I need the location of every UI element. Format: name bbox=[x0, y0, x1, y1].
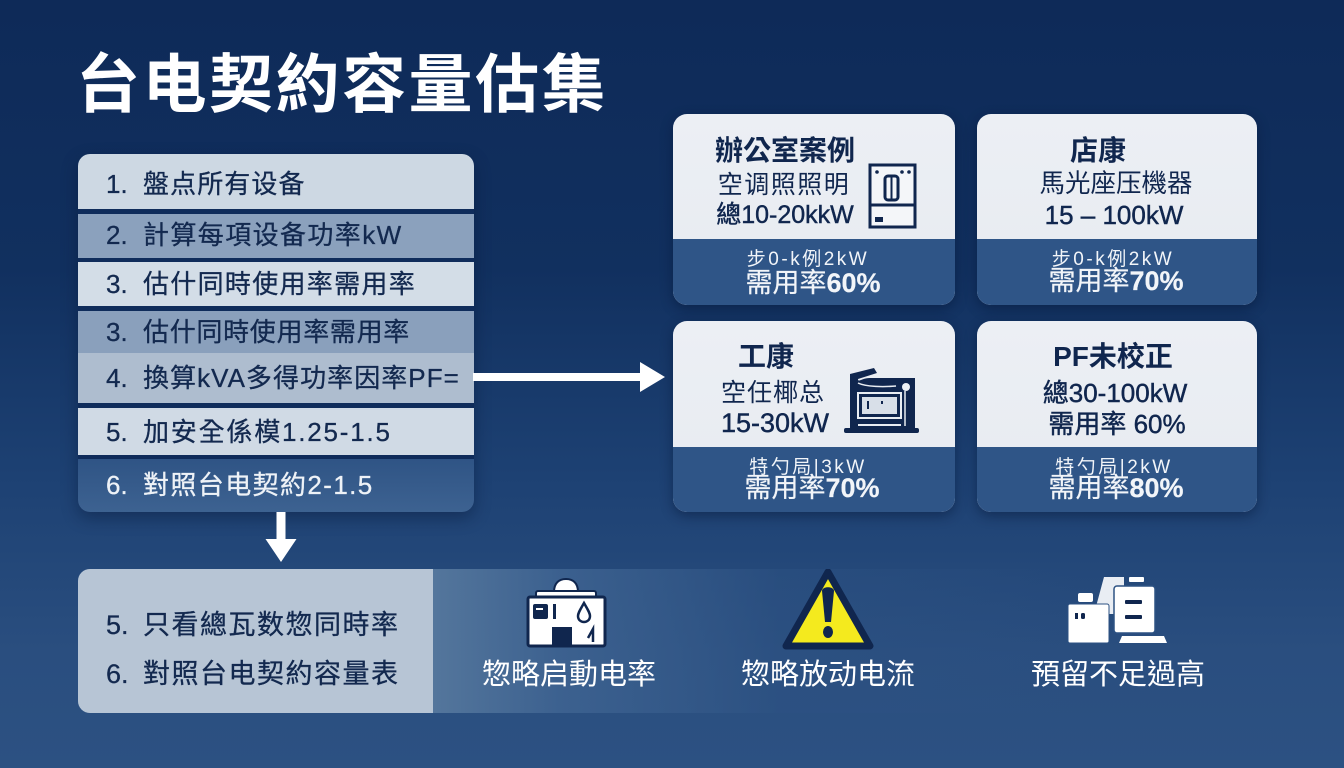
label: 惣略放动电流 bbox=[741, 659, 915, 691]
card: factory bbox=[673, 321, 955, 512]
icon: cabinets bbox=[1068, 577, 1167, 643]
label: 惣略启動电率 bbox=[482, 659, 656, 691]
card body text: 馬光座压機器 bbox=[1039, 170, 1193, 198]
step 2 bbox=[78, 214, 474, 258]
step 1: 盤点所有设备 bbox=[143, 169, 306, 199]
panel: common mistakes bbox=[78, 569, 1258, 713]
card footer bbox=[673, 239, 955, 305]
panel: steps list bbox=[78, 154, 474, 512]
step 3: 估什同時使用率需用率 bbox=[143, 269, 416, 299]
icon: fridge bbox=[868, 164, 916, 228]
card: office case bbox=[673, 114, 955, 305]
card body text: 總30-100kW bbox=[1043, 378, 1187, 408]
card: factory: 15-30kW bbox=[721, 408, 829, 438]
step 3 repeated: 估什同時使用率需用率 bbox=[143, 317, 410, 347]
card footer: 特勺局|2kW bbox=[1055, 457, 1173, 478]
card footer: 需用率80% bbox=[1048, 473, 1184, 503]
card heading: 辦公室案例 bbox=[715, 135, 855, 166]
step 3: 3. bbox=[106, 269, 128, 299]
step 6: 6. bbox=[106, 470, 128, 500]
step 4: 換算kVA多得功率因率PF= bbox=[143, 363, 460, 393]
mistake: reserve margin bbox=[1031, 577, 1205, 691]
icon: building bbox=[526, 578, 606, 648]
step 3 repeated: 3. bbox=[106, 317, 128, 347]
step 4 bbox=[78, 353, 474, 403]
step 1 bbox=[78, 154, 474, 209]
card footer bbox=[977, 239, 1257, 305]
card heading: 工康 bbox=[738, 341, 794, 372]
card: office case: 總10-20kkW bbox=[716, 201, 854, 229]
icon: generator machine bbox=[844, 368, 919, 433]
card footer: 特勺局|3kW bbox=[749, 457, 867, 478]
card footer bbox=[977, 447, 1257, 512]
step 3 repeated bbox=[78, 311, 474, 353]
card footer: 步0-k例2kW bbox=[747, 249, 869, 270]
mistake: starting current bbox=[741, 569, 915, 691]
card footer: 需用率70% bbox=[744, 473, 880, 503]
step 4: 4. bbox=[106, 363, 128, 393]
mistake: startup bbox=[482, 578, 656, 691]
mistake 6: 6. bbox=[106, 659, 129, 689]
card body text: 空任椰总 bbox=[721, 379, 825, 407]
mistake 5: 只看總瓦数惣同時率 bbox=[143, 610, 400, 640]
step 3 bbox=[78, 262, 474, 306]
card footer: 步0-k例2kW bbox=[1052, 249, 1174, 270]
step 2: 計算每項设备功率kW bbox=[143, 220, 403, 250]
step 5 bbox=[78, 408, 474, 455]
card body text: 空调照照明 bbox=[718, 171, 850, 199]
card footer: 需用率60% bbox=[745, 268, 881, 298]
mistake 5: 5. bbox=[106, 610, 129, 640]
title: 台电契約容量估集 bbox=[76, 49, 608, 121]
arrow: list to cards bbox=[473, 362, 665, 392]
step 1: 1. bbox=[106, 169, 128, 199]
card: store: 15 – 100kW bbox=[1045, 200, 1183, 230]
step 6 bbox=[78, 459, 474, 512]
icon: warning triangle bbox=[782, 569, 874, 650]
step 5: 加安全係模1.25-1.5 bbox=[143, 417, 392, 447]
card footer: 需用率70% bbox=[1048, 266, 1184, 296]
step 2: 2. bbox=[106, 220, 128, 250]
arrow: list to pitfalls bbox=[266, 512, 296, 562]
label: 預留不足過高 bbox=[1031, 659, 1205, 691]
mistakes text block bbox=[78, 569, 433, 713]
step 5: 5. bbox=[106, 417, 128, 447]
card footer bbox=[673, 447, 955, 512]
card: PF not corrected: 需用率 60% bbox=[1048, 409, 1186, 439]
mistake 6: 對照台电契約容量表 bbox=[143, 659, 400, 689]
card: store bbox=[977, 114, 1257, 305]
step 6: 對照台电契約2-1.5 bbox=[143, 470, 374, 500]
card: PF not corrected bbox=[977, 321, 1257, 512]
card heading: 店康 bbox=[1070, 135, 1126, 166]
card heading: PF未校正 bbox=[1053, 341, 1173, 372]
